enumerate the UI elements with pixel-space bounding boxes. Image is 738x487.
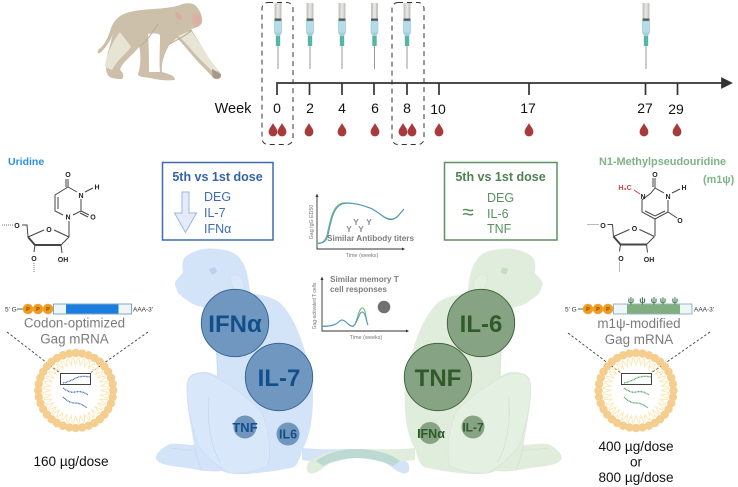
heading: Uridine: Uridine [8, 156, 44, 168]
bubble: TNF small blue: TNF [232, 420, 258, 435]
bubble: IL-7 small green: IL-7 [462, 420, 484, 434]
mRNA construct: m1psi: P [586, 307, 590, 313]
tail overlap [316, 449, 400, 466]
mRNA construct: uridine: P [46, 307, 50, 313]
m1psi molecule [588, 172, 687, 272]
chart: antibody titers: Y [353, 217, 359, 227]
mRNA construct: uridine: AAA-3' [133, 306, 153, 314]
week labels: Week [215, 101, 252, 117]
zoom lines: m1psi LNP [568, 332, 710, 373]
week labels: 8 [403, 100, 411, 116]
dashed box: week 8 [392, 2, 424, 144]
uridine molecule [2, 172, 100, 273]
bubble: TNF small blue [232, 416, 258, 438]
bubble: IL-7 large: IL-7 [258, 365, 300, 392]
syringes [274, 3, 650, 69]
bubble: TNF large [404, 343, 472, 411]
chart: memory T cell responses: Similar memory T [330, 275, 399, 284]
uridine molecule: O [31, 256, 37, 263]
m1psi molecule: O [600, 223, 606, 230]
bubble: TNF large: TNF [415, 365, 461, 392]
panel: uridine 5th vs 1st dose: 5th vs 1st dose [172, 170, 263, 184]
week labels: 2 [306, 100, 314, 116]
m1psi molecule: O [677, 218, 683, 225]
lipid nanoparticle: m1psi [594, 349, 678, 432]
uridine molecule: H [94, 184, 100, 192]
bubble: IL-6 large: IL-6 [460, 311, 502, 338]
bubble: IL-6 large [447, 289, 515, 357]
doses: 400 or 800 µg/dose: or [630, 454, 643, 470]
chart: antibody titers: Time (weeks) [346, 253, 379, 259]
panel: m1psi 5th vs 1st dose: ≈ [462, 201, 474, 224]
week labels: 27 [637, 100, 653, 116]
timeline arrow with ticks [277, 78, 731, 95]
chart: memory T cell responses: Time (weeks) [350, 335, 383, 341]
m1psi molecule: N [665, 194, 671, 201]
uridine molecule: N [65, 214, 71, 222]
doses: 400 or 800 µg/dose: 800 µg/dose [598, 470, 674, 485]
panel: m1psi 5th vs 1st dose: DEG [487, 191, 514, 205]
label: m1psi-modified Gag mRNA [597, 316, 681, 347]
week labels: 10 [430, 101, 446, 117]
m1psi molecule: OH [644, 257, 654, 264]
uridine molecule: O [14, 223, 20, 230]
uridine molecule: O [90, 214, 96, 222]
mRNA construct: m1psi: ψ [672, 295, 678, 305]
week labels: 6 [371, 100, 379, 116]
label: m1psi-modified Gag mRNA: Gag mRNA [605, 332, 673, 347]
bubble: IL-7 small green [462, 416, 484, 438]
m1psi molecule: O [652, 172, 658, 179]
heading: N1-Methylpseudouridine: N1-Methylpseudouridine [599, 156, 726, 168]
walking macaque illustration [98, 3, 221, 80]
uridine molecule: OH [58, 257, 68, 264]
chart: antibody titers: Y [346, 224, 352, 234]
mRNA construct: uridine: P [36, 307, 40, 313]
panel: uridine 5th vs 1st dose [162, 162, 273, 240]
bubble: IFNα large: IFNα [208, 311, 262, 338]
m1psi molecule: H₃C [618, 185, 632, 192]
uridine molecule: O [65, 172, 71, 179]
mRNA construct: m1psi: AAA-3' [694, 306, 714, 314]
chart: antibody titers: Gag IgG ED50 [309, 205, 315, 239]
panel: uridine 5th vs 1st dose: IFNα [204, 222, 231, 236]
blood draw drops [269, 123, 681, 136]
bubble: IL6 small blue: IL6 [279, 428, 297, 442]
week labels [215, 100, 684, 117]
week labels: 4 [338, 100, 346, 116]
week labels: 17 [520, 100, 536, 116]
mRNA construct: uridine [5, 304, 153, 314]
label: Codon-optimized Gag mRNA: Codon-optimized [24, 316, 125, 330]
panel: m1psi 5th vs 1st dose [444, 162, 557, 240]
chart: memory T cell responses: cell responses [330, 285, 387, 294]
uridine molecule: O [46, 227, 52, 234]
icon: down arrow [174, 192, 196, 232]
heading: N1-Methylpseudouridine: (m1ψ) [703, 174, 735, 186]
chart: antibody titers: Similar Antibody titers [327, 234, 414, 243]
mRNA construct: m1psi: ψ [651, 295, 657, 305]
bubble: IL-7 large [245, 343, 313, 411]
mRNA construct: m1psi [565, 295, 714, 314]
m1psi molecule: H [681, 185, 687, 192]
mRNA construct: uridine: 5' G [5, 306, 17, 314]
label: Codon-optimized Gag mRNA [24, 316, 125, 346]
doses: 400 or 800 µg/dose: 400 µg/dose [598, 439, 674, 454]
chart: memory T cell responses [312, 275, 409, 341]
panel: m1psi 5th vs 1st dose: TNF [487, 222, 512, 236]
mRNA construct: uridine: P [26, 307, 30, 313]
m1psi molecule: O [632, 226, 638, 233]
label: Codon-optimized Gag mRNA: Gag mRNA [40, 332, 109, 346]
sitting macaque: green [307, 248, 562, 474]
mRNA construct: m1psi: ψ [628, 295, 634, 305]
dashed box: week 0 [262, 2, 293, 144]
dose: 160 µg/dose: 160 µg/dose [33, 454, 109, 469]
heading: N1-Methylpseudouridine [599, 156, 735, 186]
sitting macaque: blue [156, 248, 409, 474]
mRNA construct: m1psi: P [606, 307, 610, 313]
chart: antibody titers [309, 194, 414, 259]
panel: m1psi 5th vs 1st dose: 5th vs 1st dose [455, 170, 546, 184]
week labels: 29 [668, 101, 684, 117]
m1psi molecule: O [618, 256, 624, 263]
panel: uridine 5th vs 1st dose: IL-7 [204, 206, 226, 220]
uridine molecule: N [78, 193, 84, 200]
mRNA construct: m1psi: P [596, 307, 600, 313]
bubble: IFNα small green: IFNα [417, 427, 445, 441]
panel: uridine 5th vs 1st dose: DEG [204, 190, 231, 204]
tail: blue [302, 448, 409, 473]
m1psi molecule: N [640, 194, 646, 201]
tail: green [307, 448, 415, 473]
lipid nanoparticle: uridine [34, 349, 117, 432]
zoom lines: uridine LNP [7, 332, 148, 373]
panel: m1psi 5th vs 1st dose: IL-6 [487, 207, 509, 221]
mRNA construct: m1psi: 5' G [565, 306, 577, 314]
bubble: IFNα large [201, 289, 269, 357]
mRNA construct: m1psi: ψ [660, 295, 666, 305]
chart: memory T cell responses: Gag-activated T cells [312, 282, 318, 329]
label: m1psi-modified Gag mRNA: m1ψ-modified [597, 316, 681, 331]
chart: antibody titers: Y [366, 217, 372, 227]
chart: antibody titers: Y [358, 224, 364, 234]
bubble: IFNα small green [417, 422, 445, 444]
doses: 400 or 800 µg/dose [598, 439, 674, 485]
bubble: IL6 small blue [276, 422, 300, 446]
week labels: 0 [273, 100, 281, 116]
mRNA construct: m1psi: ψ [639, 295, 646, 305]
